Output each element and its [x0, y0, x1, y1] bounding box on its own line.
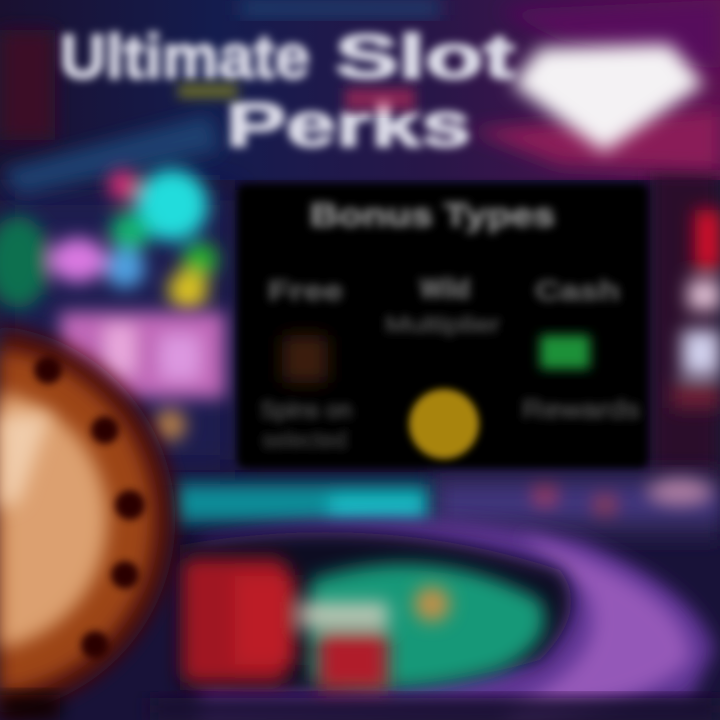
- icon: gems cluster: [0, 169, 218, 310]
- icon: brown chest: [282, 335, 328, 383]
- title accents: [178, 84, 415, 110]
- roulette wheel: [0, 326, 175, 720]
- panel: pink chips strip: [60, 312, 225, 441]
- column 2 heading: Wild: [420, 273, 470, 304]
- icon: gold coin: [409, 389, 479, 459]
- column 3 body text: Rewards: [522, 394, 640, 424]
- title: Perks: [226, 91, 471, 160]
- icon: green square: [540, 335, 590, 369]
- column 1 heading: Free: [268, 275, 343, 306]
- bottom shade: [150, 698, 720, 720]
- title: Slot: [335, 23, 515, 92]
- column 3 heading: Cash: [535, 275, 620, 306]
- column 1 body text: Spins on: [260, 397, 352, 424]
- casino table: [180, 520, 715, 715]
- panel heading: Bonus Types: [310, 197, 555, 233]
- red chips stack: [182, 558, 450, 690]
- panel: black info card: [237, 184, 648, 468]
- icon: white diamond: [512, 44, 704, 152]
- column 2 subtext: Multiplier: [385, 312, 500, 337]
- distant lights row: [440, 478, 720, 520]
- right red and white shapes: [672, 210, 720, 408]
- column 1 body text line 2: selected: [262, 427, 347, 454]
- title: [60, 23, 515, 160]
- title: Ultimate: [60, 23, 310, 92]
- teal bar: [175, 484, 430, 523]
